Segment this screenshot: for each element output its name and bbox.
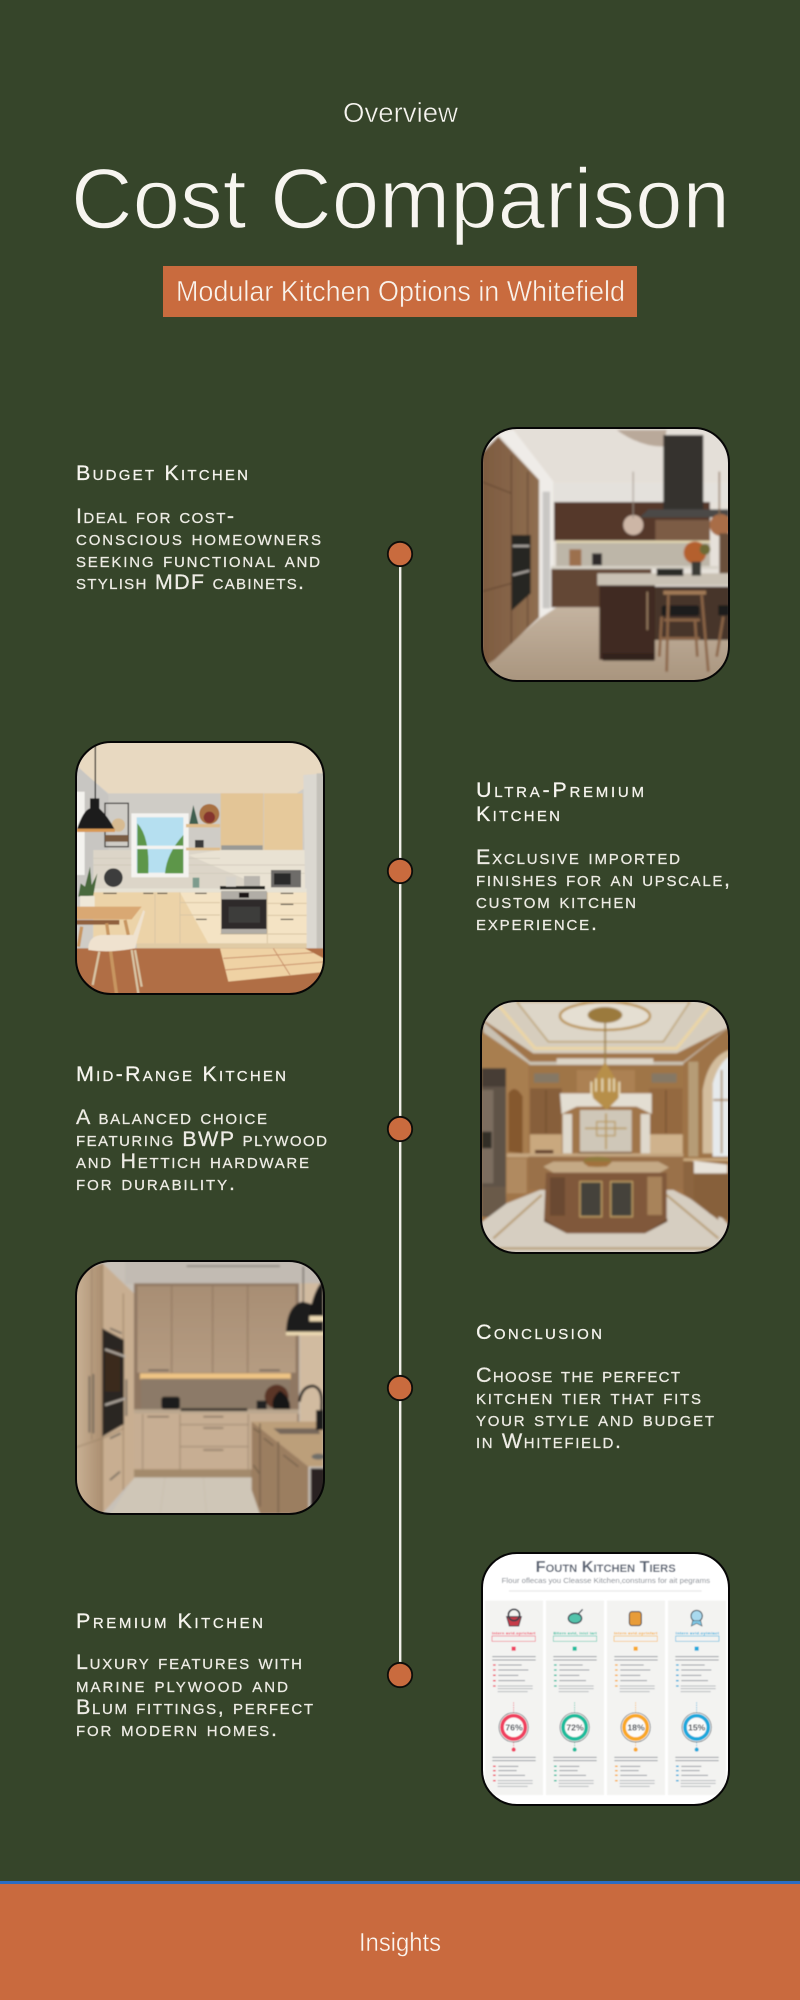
text block: Premium Kitchen: Premium Kitchen	[76, 1609, 263, 1633]
image: budget kitchen photo, dark wood	[480, 427, 733, 683]
thumbnail column headings	[492, 1630, 720, 1641]
thumbnail percentages: 72%	[566, 1722, 584, 1732]
subtitle banner: Modular Kitchen Options in Whitefield	[176, 276, 625, 308]
timeline dot 5	[388, 1663, 412, 1687]
thumbnail percentages	[505, 1724, 706, 1732]
text block: Ultra-Premium Kitchen: custom kitchen	[476, 889, 636, 913]
footer band	[0, 1881, 800, 2000]
timeline line	[399, 554, 401, 1675]
image frame 3	[481, 1001, 729, 1253]
thumbnail column 1	[485, 1601, 543, 1795]
text block: Ultra-Premium Kitchen	[476, 778, 730, 935]
text block: Mid-Range Kitchen: A balanced choice	[76, 1105, 267, 1129]
text block: Conclusion	[476, 1320, 714, 1453]
timeline dot 4	[388, 1376, 412, 1400]
thumbnail column headings: Bitern avid, inicl lart	[553, 1630, 597, 1635]
timeline dot 2	[388, 859, 412, 883]
text block: Ultra-Premium Kitchen: finishes for an upscale,	[476, 867, 730, 891]
text block: Premium Kitchen: Blum fittings, perfect	[76, 1695, 313, 1719]
text block: Ultra-Premium Kitchen: experience.	[476, 911, 597, 935]
image: ultra-premium ornate kitchen	[478, 998, 732, 1257]
thumbnail title: Foutn Kitchen Tiers	[536, 1559, 676, 1576]
thumbnail column headings: Intern avid.oprichart	[492, 1630, 536, 1635]
text block: Conclusion: in Whitefield.	[476, 1429, 621, 1453]
thumbnail percentages: 76%	[505, 1722, 523, 1732]
text block: Conclusion: your style and budget	[476, 1407, 714, 1431]
timeline dot 3	[388, 1117, 412, 1141]
timeline	[388, 542, 412, 1687]
timeline dot 1	[388, 542, 412, 566]
image frame 4	[76, 1261, 324, 1514]
text block: Mid-Range Kitchen: featuring BWP plywood	[76, 1127, 327, 1151]
footer band: Insights	[359, 1927, 441, 1957]
thumbnail column headings: Intern avid.oyimlact	[676, 1630, 720, 1635]
image frame 2	[76, 742, 324, 994]
text block: Mid-Range Kitchen	[76, 1062, 327, 1195]
subtitle banner	[163, 266, 637, 317]
image: four kitchen tiers infographic thumbnail	[480, 1550, 733, 1808]
thumbnail percentages: 18%	[627, 1722, 645, 1732]
text block: Mid-Range Kitchen: Mid-Range Kitchen	[76, 1062, 286, 1086]
image frame 5	[482, 1553, 729, 1805]
thumbnail percentages: 15%	[688, 1722, 706, 1732]
text block: Mid-Range Kitchen: and Hettich hardware	[76, 1149, 309, 1173]
text block: Budget Kitchen: Ideal for cost-	[76, 504, 234, 528]
text block: Ultra-Premium Kitchen: Exclusive imported	[476, 845, 680, 869]
text block: Premium Kitchen: Luxury features with	[76, 1650, 302, 1674]
text block: Premium Kitchen	[76, 1609, 313, 1741]
text block: Conclusion: Choose the perfect	[476, 1363, 680, 1387]
text block: Conclusion: Conclusion	[476, 1320, 602, 1344]
thumbnail column 3	[607, 1601, 665, 1795]
text block: Premium Kitchen: for modern homes.	[76, 1717, 277, 1741]
text block: Premium Kitchen: marine plywood and	[76, 1673, 288, 1697]
image frame 1	[482, 428, 729, 681]
title: Cost Comparison: Cost Comparison	[71, 152, 730, 247]
thumbnail icons	[507, 1609, 702, 1626]
text block: Ultra-Premium Kitchen: Kitchen	[476, 802, 560, 826]
text block: Mid-Range Kitchen: for durability.	[76, 1171, 235, 1195]
image: mid-range kitchen illustration	[73, 740, 327, 998]
eyebrow: Overview: Overview	[343, 97, 459, 128]
thumbnail subtitle: Flour oflecas you Cleasse Kitchen,consturns for ait pegrams	[502, 1576, 710, 1585]
text block: Budget Kitchen: seeking functional and	[76, 548, 320, 572]
text block: Budget Kitchen: Budget Kitchen	[76, 461, 248, 485]
image: premium wood kitchen photo	[73, 1258, 327, 1517]
text block: Budget Kitchen	[76, 461, 321, 594]
thumbnail column 2	[546, 1601, 604, 1795]
text block: Budget Kitchen: conscious homeowners	[76, 526, 321, 550]
text block: Budget Kitchen: stylish MDF cabinets.	[76, 570, 304, 594]
thumbnail column headings: Intern avid.oprinfart	[614, 1630, 658, 1635]
text block: Ultra-Premium Kitchen: Ultra-Premium	[476, 778, 644, 802]
text block: Conclusion: kitchen tier that fits	[476, 1385, 701, 1409]
thumbnail column 4	[668, 1601, 726, 1795]
